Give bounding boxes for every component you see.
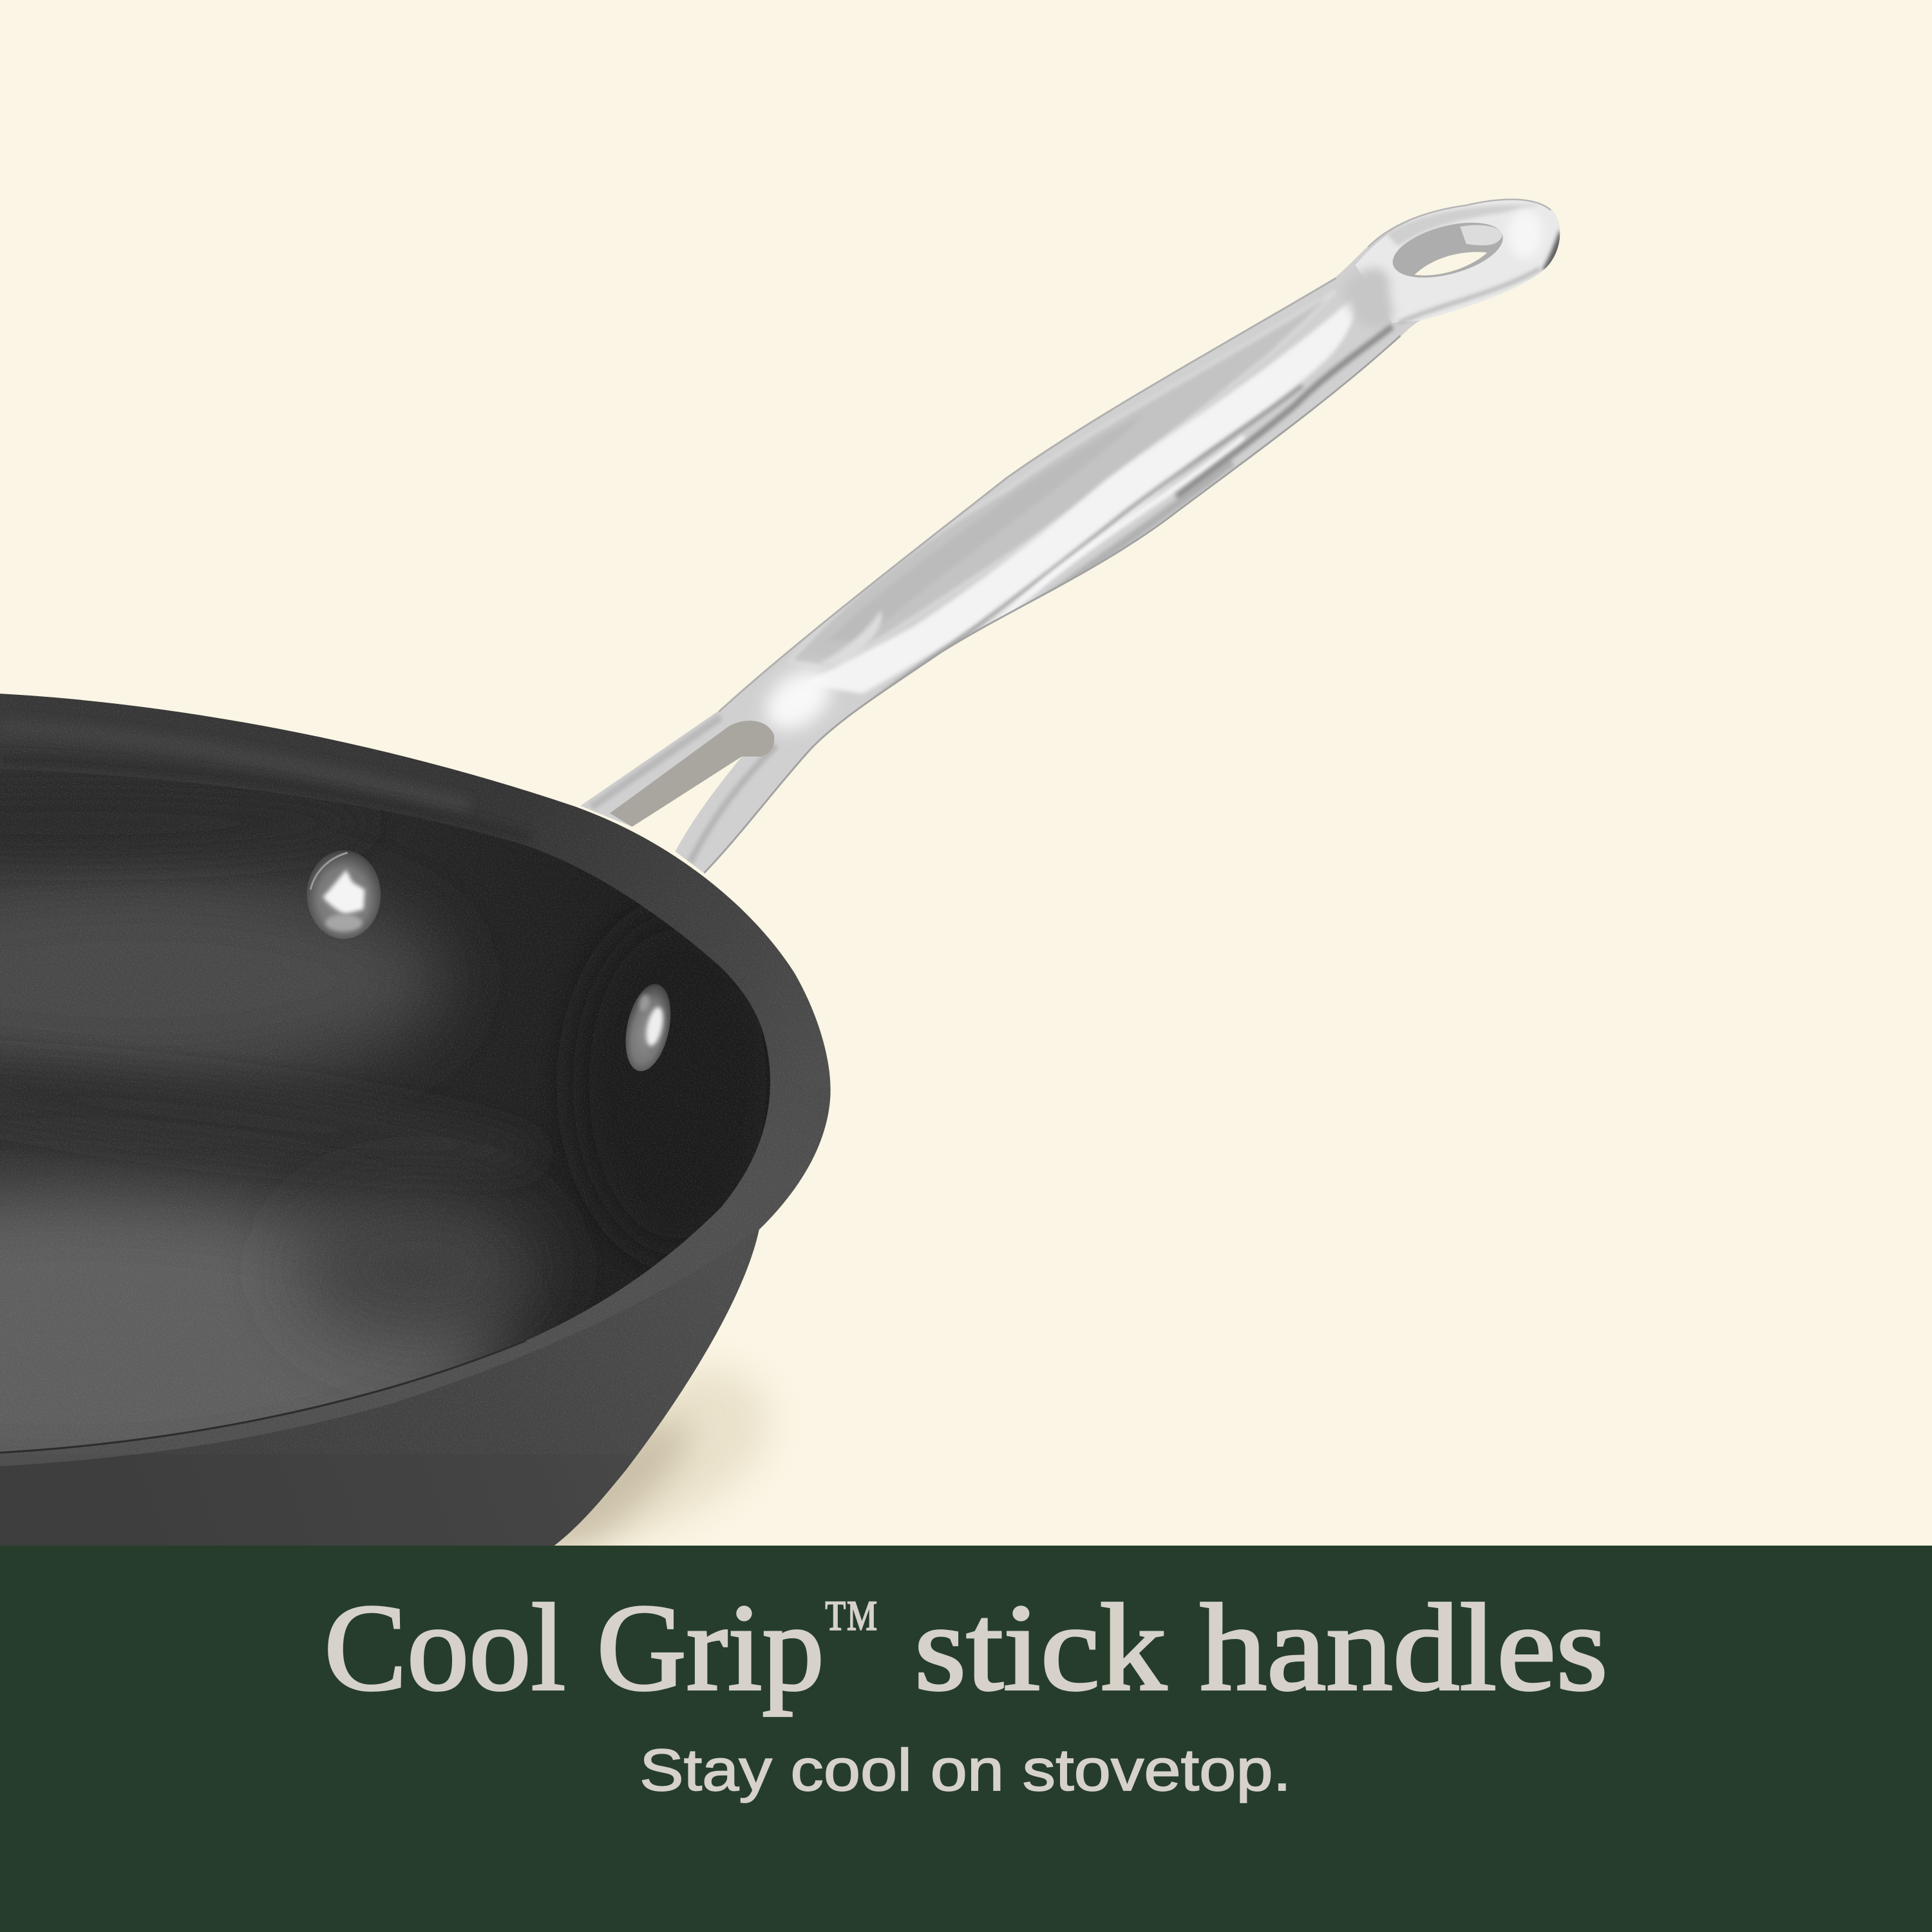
bright centre strip	[803, 291, 1361, 694]
handle shading details	[591, 198, 1565, 874]
pan interior	[0, 739, 813, 1497]
rim sheen	[0, 727, 530, 838]
neck shade	[1343, 268, 1393, 327]
eye end dark edge	[1542, 229, 1565, 274]
handle hole	[1387, 213, 1509, 288]
bright fork highlight	[760, 665, 837, 735]
floor mid sheen	[296, 1195, 542, 1343]
upper outer edge	[718, 277, 1336, 711]
surface grain	[0, 690, 838, 1454]
floor sheen	[0, 1189, 493, 1497]
dark crease	[0, 1043, 544, 1188]
rivet left	[307, 850, 381, 939]
inner rim line	[0, 1341, 526, 1453]
subtitle: Stay cool on stovetop.	[639, 1738, 1291, 1803]
rivet right	[618, 980, 678, 1075]
interior base	[0, 739, 813, 1479]
lower outer edge	[705, 336, 1401, 874]
slot inner metal	[610, 721, 774, 827]
handle eye plate	[1356, 198, 1560, 323]
outer wall	[0, 1229, 759, 1550]
pan shadow	[554, 1361, 774, 1546]
left prong shading	[591, 717, 721, 807]
eye plate top sheen	[1386, 204, 1540, 247]
front lip	[0, 1078, 831, 1466]
pan rim and silhouette	[0, 694, 831, 1550]
right prong shading	[690, 746, 776, 862]
panel inner sheen 2	[819, 610, 882, 665]
lower streak	[829, 386, 1302, 743]
right wall shade	[573, 912, 782, 1257]
neck streak	[1177, 327, 1392, 497]
frying pan	[0, 690, 838, 1550]
eye ridge	[1399, 269, 1540, 323]
title: ™	[823, 1586, 878, 1665]
title: stick handles	[914, 1578, 1608, 1716]
bottom green banner	[0, 1546, 1932, 1932]
back wall shade	[0, 788, 370, 858]
stainless steel handle	[580, 198, 1565, 874]
concave panel	[790, 291, 1336, 667]
title	[324, 1578, 1608, 1716]
handle body	[580, 198, 1560, 874]
panel inner sheen	[828, 413, 1146, 641]
eye plate right highlight	[1510, 207, 1540, 256]
lower white streak	[838, 437, 1244, 739]
title: Cool Grip	[324, 1578, 824, 1716]
lower grey band	[862, 462, 1232, 721]
eye outer edge	[1368, 198, 1551, 247]
upper wall sheen	[0, 875, 444, 1084]
